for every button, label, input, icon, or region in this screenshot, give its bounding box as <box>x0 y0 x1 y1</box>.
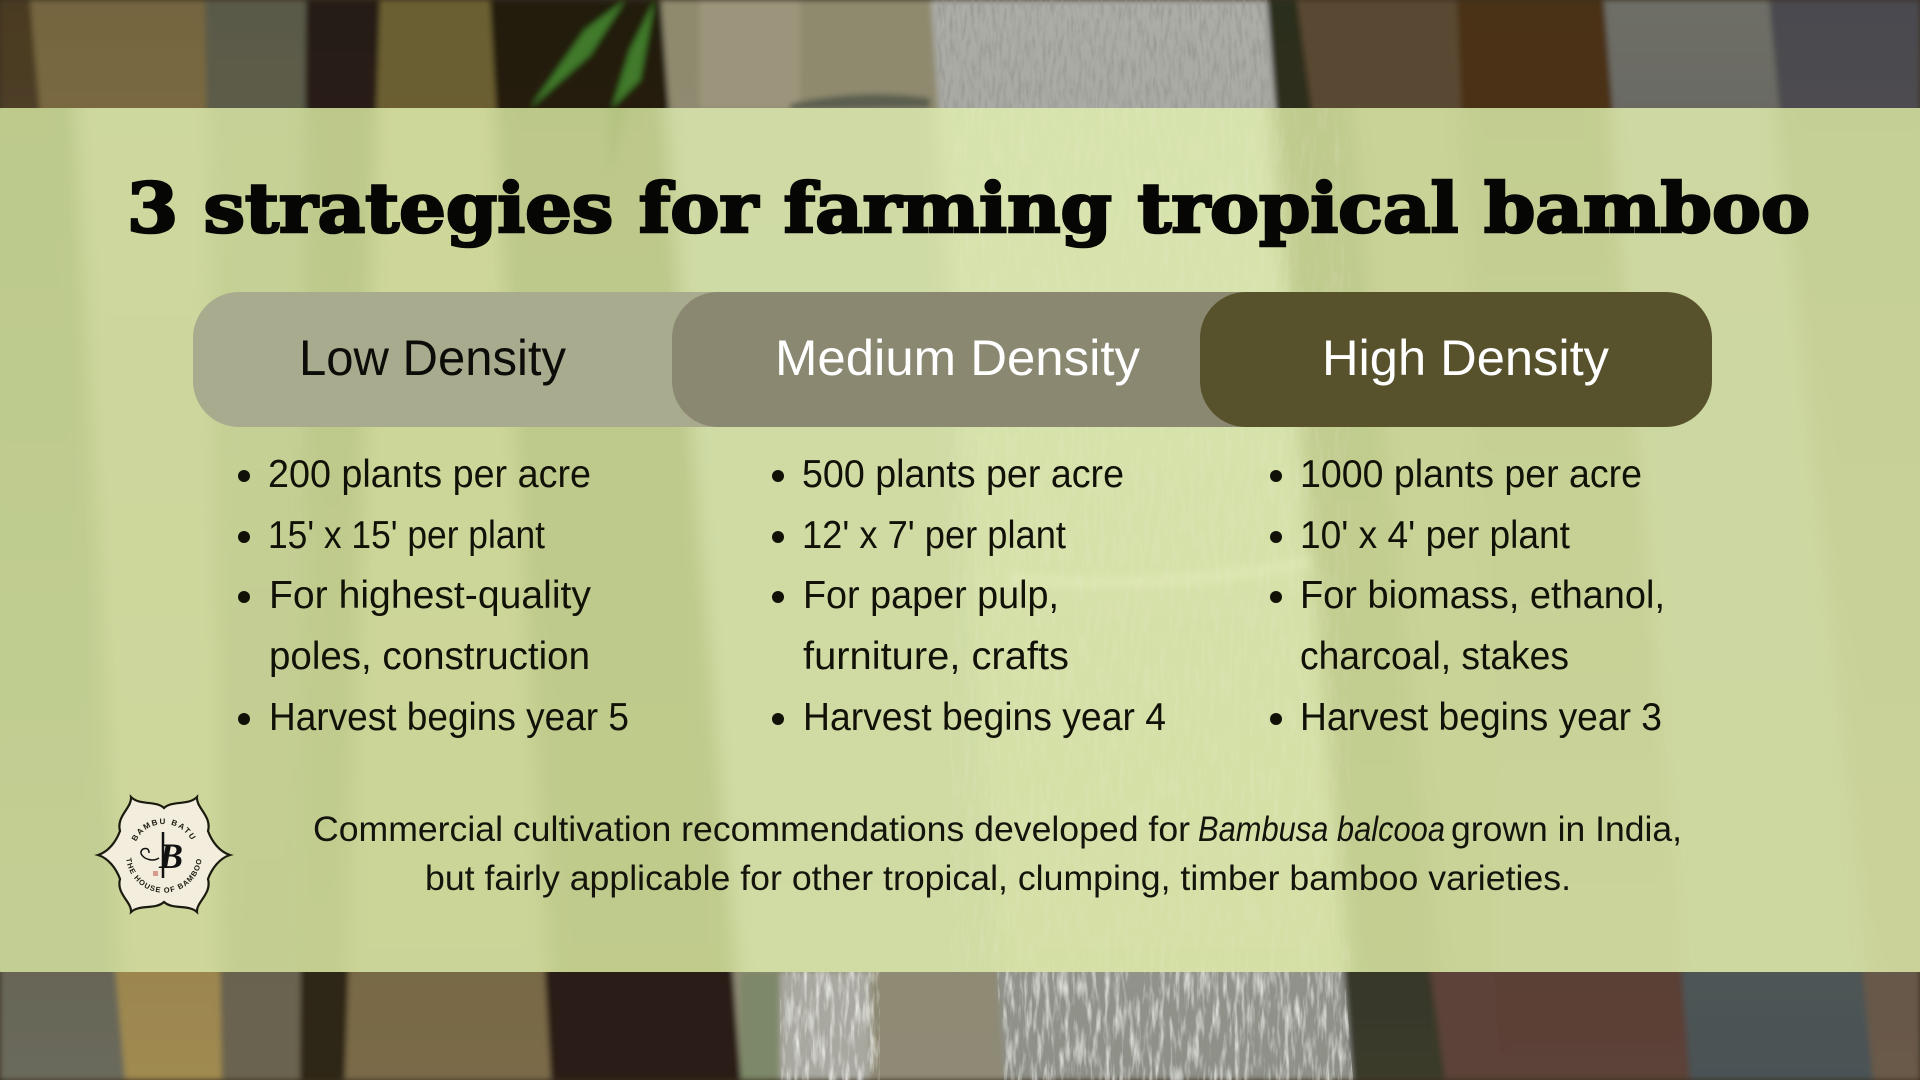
list: medium density: furniture, crafts <box>803 635 1069 678</box>
list: low density: Harvest begins year 5 <box>269 696 629 739</box>
density header pills <box>193 292 1712 427</box>
list: medium density: 12' x 7' per plant <box>802 514 1066 557</box>
list: medium density <box>772 453 1166 739</box>
icon: Bambu Batu logo: THE HOUSE OF BAMBOO <box>126 858 202 893</box>
footer note: Commercial cultivation recommendations developed for <box>313 810 1190 849</box>
footer note <box>313 810 1682 898</box>
list: low density: 15' x 15' per plant <box>268 514 545 557</box>
list: high density: 1000 plants per acre <box>1300 453 1642 496</box>
icon: Bambu Batu logo: BAMBU BATU <box>131 818 196 842</box>
pill: medium density <box>672 292 1312 427</box>
list: low density: For highest-quality <box>269 574 591 617</box>
pill: high density <box>1200 292 1712 427</box>
list: low density <box>238 453 629 739</box>
icon: Bambu Batu logo <box>94 794 234 915</box>
list: low density: 200 plants per acre <box>268 453 591 496</box>
list: high density: Harvest begins year 3 <box>1300 696 1662 739</box>
list: medium density: For paper pulp, <box>803 574 1059 617</box>
list: medium density: 500 plants per acre <box>802 453 1124 496</box>
pill: low density <box>193 292 793 427</box>
icon: Bambu Batu logo: B <box>158 836 183 876</box>
list: medium density: Harvest begins year 4 <box>803 696 1166 739</box>
footer note: Bambusa balcooa <box>1198 810 1445 849</box>
pill: low density: Low Density <box>299 330 566 386</box>
list: high density <box>1270 453 1665 739</box>
pill: medium density: Medium Density <box>775 330 1140 386</box>
list: high density: For biomass, ethanol, <box>1300 574 1665 617</box>
list: low density: poles, construction <box>269 635 590 678</box>
footer note: grown in India, <box>1451 810 1682 849</box>
list: high density: 10' x 4' per plant <box>1300 514 1570 557</box>
pill: high density: High Density <box>1322 330 1609 386</box>
footer note: but fairly applicable for other tropical, clumping, timber bamboo varieties. <box>425 859 1571 898</box>
list: high density: charcoal, stakes <box>1300 635 1569 678</box>
title: 3 strategies for farming tropical bamboo <box>127 169 1810 249</box>
